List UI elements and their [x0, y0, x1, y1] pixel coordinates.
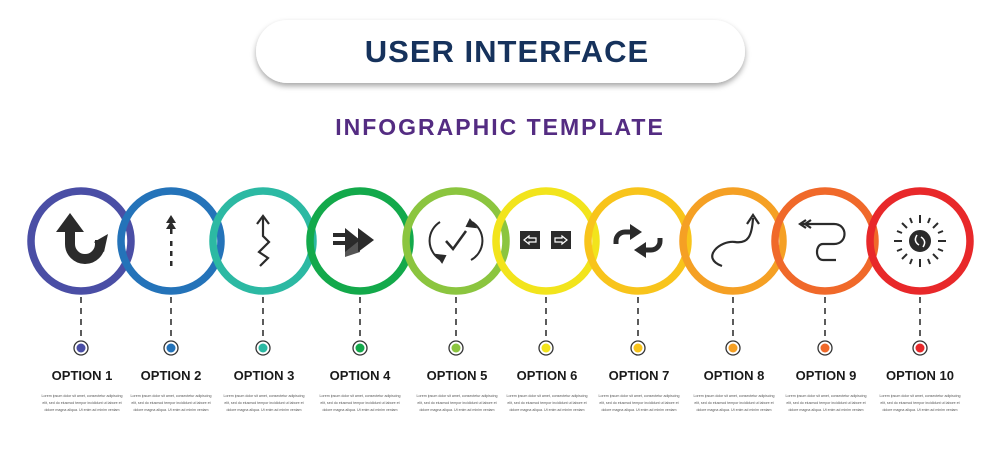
option labels: OPTION 9 [796, 368, 856, 383]
description texts: dolore magna aliqua. Ut enim ad minim veniam [226, 408, 302, 412]
icon 4: double fast forward [333, 228, 374, 257]
description texts: Lorem ipsum dolor sit amet, consectetur adipiscing [599, 394, 679, 398]
description texts: elit, sed do eiusmod tempor incididunt ut labore et [599, 401, 679, 405]
description texts: Lorem ipsum dolor sit amet, consectetur adipiscing [507, 394, 587, 398]
description texts: elit, sed do eiusmod tempor incididunt ut labore et [694, 401, 774, 405]
connectors [81, 297, 920, 338]
description texts: Lorem ipsum dolor sit amet, consectetur adipiscing [131, 394, 211, 398]
icon 7: cycle arrows [616, 224, 660, 258]
description texts: Lorem ipsum dolor sit amet, consectetur adipiscing [417, 394, 497, 398]
description texts: dolore magna aliqua. Ut enim ad minim veniam [322, 408, 398, 412]
description texts: Lorem ipsum dolor sit amet, consectetur adipiscing [786, 394, 866, 398]
description texts: Lorem ipsum dolor sit amet, consectetur adipiscing [880, 394, 960, 398]
description texts: dolore magna aliqua. Ut enim ad minim veniam [788, 408, 864, 412]
description texts: elit, sed do eiusmod tempor incididunt ut labore et [786, 401, 866, 405]
description texts: dolore magna aliqua. Ut enim ad minim veniam [133, 408, 209, 412]
title pill: USER INTERFACE [365, 34, 649, 69]
description texts: elit, sed do eiusmod tempor incididunt ut labore et [417, 401, 497, 405]
description texts: elit, sed do eiusmod tempor incididunt ut labore et [131, 401, 211, 405]
description texts [42, 394, 960, 412]
description texts: elit, sed do eiusmod tempor incididunt ut labore et [224, 401, 304, 405]
description texts: Lorem ipsum dolor sit amet, consectetur adipiscing [224, 394, 304, 398]
description texts: elit, sed do eiusmod tempor incididunt ut labore et [880, 401, 960, 405]
option labels: OPTION 7 [609, 368, 669, 383]
option labels: OPTION 8 [704, 368, 764, 383]
option labels: OPTION 4 [330, 368, 391, 383]
icon 9: hook arrow left [800, 220, 844, 260]
description texts: dolore magna aliqua. Ut enim ad minim veniam [601, 408, 677, 412]
description texts: elit, sed do eiusmod tempor incididunt ut labore et [320, 401, 400, 405]
icon 1: u-turn arrow [56, 213, 108, 259]
option labels: OPTION 6 [517, 368, 577, 383]
icon 6: left/right buttons [520, 231, 571, 249]
subtitle: INFOGRAPHIC TEMPLATE [335, 114, 665, 140]
icon 10: sun/globe [894, 215, 946, 267]
description texts: dolore magna aliqua. Ut enim ad minim veniam [419, 408, 495, 412]
description texts: elit, sed do eiusmod tempor incididunt ut labore et [507, 401, 587, 405]
circles ring [31, 191, 970, 291]
icon 3: zigzag arrow [257, 216, 269, 266]
icon 8: curvy arrow up-right [712, 215, 759, 266]
option labels: OPTION 2 [141, 368, 201, 383]
description texts: Lorem ipsum dolor sit amet, consectetur adipiscing [320, 394, 400, 398]
option labels [52, 368, 954, 383]
markers [74, 341, 927, 355]
icon 5: refresh check [430, 220, 482, 262]
option labels: OPTION 1 [52, 368, 112, 383]
description texts: dolore magna aliqua. Ut enim ad minim veniam [44, 408, 120, 412]
description texts: Lorem ipsum dolor sit amet, consectetur adipiscing [694, 394, 774, 398]
description texts: Lorem ipsum dolor sit amet, consectetur adipiscing [42, 394, 122, 398]
option labels: OPTION 3 [234, 368, 294, 383]
description texts: elit, sed do eiusmod tempor incididunt ut labore et [42, 401, 122, 405]
description texts: dolore magna aliqua. Ut enim ad minim veniam [882, 408, 958, 412]
description texts: dolore magna aliqua. Ut enim ad minim veniam [696, 408, 772, 412]
option labels: OPTION 10 [886, 368, 954, 383]
option labels: OPTION 5 [427, 368, 487, 383]
icon 2: dotted up arrow [166, 215, 176, 266]
title pill [256, 20, 745, 83]
description texts: dolore magna aliqua. Ut enim ad minim veniam [509, 408, 585, 412]
